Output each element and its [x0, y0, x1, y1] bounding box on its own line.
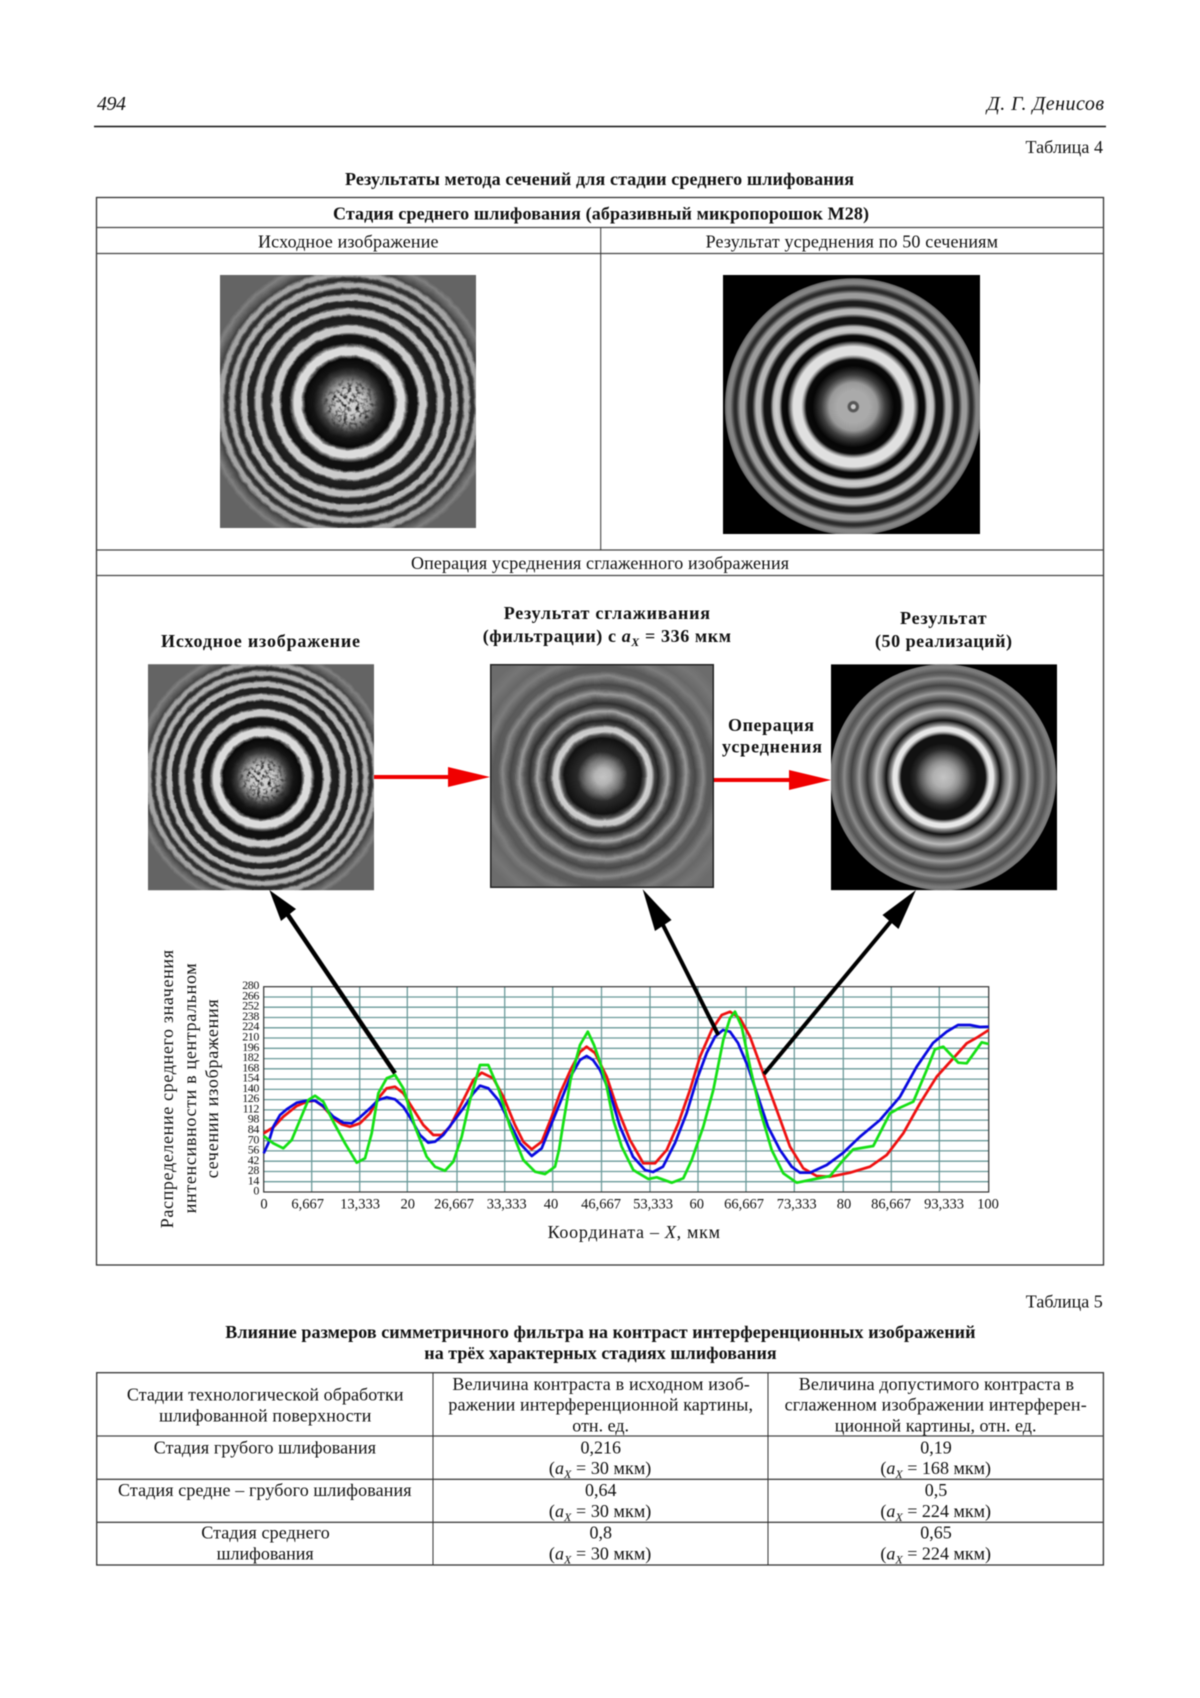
row: medium grinding: X — [563, 1552, 572, 1566]
curve: blue, averaged result — [264, 1025, 989, 1173]
heading: smoothing result: X — [630, 635, 640, 649]
heading: result of 50 realizations: Результат — [900, 608, 987, 628]
table 5 title: на трёх характерных стадиях шлифования — [424, 1343, 777, 1363]
interferogram: source image — [219, 274, 477, 529]
y axis tick labels: 98 — [248, 1112, 259, 1126]
row: coarse grinding: (a — [880, 1458, 895, 1478]
label: averaging operation — [722, 715, 822, 757]
arrow: chart to smoothed image — [643, 889, 718, 1035]
table 4 stage heading: Стадия среднего шлифования (абразивный микропорошок М28) — [333, 204, 869, 224]
table 4 title: Результаты метода сечений для стадии среднего шлифования — [345, 169, 854, 189]
y axis title — [157, 950, 222, 1228]
column heading: processing stages — [127, 1385, 404, 1426]
y axis tick labels: 56 — [248, 1143, 259, 1157]
page number: 494 — [97, 93, 126, 115]
column heading: allowed contrast in smoothed image: сглаженном изображении интерферен- — [785, 1395, 1087, 1415]
row: medium-coarse grinding: Стадия средне – грубого шлифования — [118, 1480, 412, 1500]
x axis tick labels: 40 — [544, 1196, 558, 1212]
row: medium-coarse grinding: X — [563, 1510, 572, 1524]
table 5 title: Влияние размеров симметричного фильтра на контраст интерференционных изображений — [225, 1322, 976, 1342]
x axis tick labels: 20 — [400, 1196, 415, 1212]
table 5 title — [225, 1322, 976, 1363]
row: medium-coarse grinding: (a — [880, 1501, 895, 1521]
row: medium grinding: Стадия среднего — [201, 1522, 330, 1542]
row: medium grinding: (a — [549, 1543, 564, 1563]
interferogram: averaged over 50 sections — [722, 274, 981, 535]
row: medium-coarse grinding: (a — [549, 1501, 564, 1521]
author name: Д. Г. Денисов — [985, 93, 1104, 115]
y axis title: интенсивности в центральном — [180, 963, 200, 1213]
column heading: source image: Исходное изображение — [258, 232, 438, 252]
column heading: contrast in source image: ражении интерференционной картины, — [448, 1395, 753, 1415]
y axis tick labels: 14 — [248, 1173, 259, 1187]
column heading: processing stages: шлифованной поверхности — [159, 1406, 372, 1426]
plot grid — [264, 987, 989, 1192]
x axis tick labels: 86,667 — [871, 1196, 911, 1212]
table 5 label: Таблица 5 — [1026, 1292, 1103, 1312]
row: medium grinding: 0,8 — [590, 1522, 612, 1542]
row: medium grinding: (a — [880, 1543, 895, 1563]
row: coarse grinding: (a — [549, 1458, 564, 1478]
arrow: source to smoothed — [374, 767, 490, 787]
x axis tick labels: 6,667 — [291, 1196, 324, 1212]
column heading: allowed contrast in smoothed image — [785, 1374, 1087, 1436]
y axis tick labels: 238 — [242, 1009, 259, 1023]
row: coarse grinding: = 30 мкм) — [571, 1458, 651, 1479]
y axis tick labels: 182 — [242, 1050, 259, 1064]
arrow: smoothed to averaged — [714, 770, 831, 790]
y axis tick labels: 280 — [242, 978, 259, 992]
x axis tick labels: 13,333 — [340, 1196, 380, 1212]
row: medium-coarse grinding: X — [894, 1510, 903, 1524]
y axis tick labels: 0 — [253, 1184, 259, 1198]
row: medium grinding: шлифования — [217, 1543, 314, 1563]
column heading: contrast in source image — [448, 1374, 753, 1436]
x axis tick labels: 33,333 — [487, 1196, 527, 1212]
column heading: processing stages: Стадии технологической обработки — [127, 1385, 404, 1405]
heading: smoothing result: (фильтрации) с a — [483, 626, 631, 646]
row: medium grinding — [201, 1522, 991, 1566]
row: medium grinding: = 30 мкм) — [571, 1543, 651, 1564]
x axis tick labels: 93,333 — [924, 1196, 964, 1212]
heading: smoothing result: Результат сглаживания — [504, 603, 710, 623]
y axis tick labels: 252 — [242, 999, 259, 1013]
section heading: averaging of smoothed image: Операция усреднения сглаженного изображения — [411, 553, 789, 573]
x axis tick labels: 53,333 — [633, 1196, 673, 1212]
heading: smoothing result — [483, 603, 731, 649]
heading: source image: Исходное изображение — [161, 631, 360, 651]
column heading: contrast in source image: отн. ед. — [572, 1416, 629, 1436]
x axis tick labels: 80 — [837, 1196, 851, 1212]
y axis tick labels: 168 — [242, 1060, 259, 1074]
interferogram: smoothed image — [489, 663, 715, 889]
x axis tick labels: 100 — [977, 1196, 999, 1212]
row: medium-coarse grinding: = 224 мкм) — [903, 1501, 991, 1522]
row: medium grinding: = 224 мкм) — [903, 1543, 991, 1564]
row: coarse grinding: 0,216 — [581, 1437, 621, 1457]
y axis tick labels: 70 — [248, 1132, 259, 1146]
y axis tick labels: 112 — [243, 1102, 259, 1116]
row: medium-coarse grinding: = 30 мкм) — [571, 1501, 651, 1522]
arrow: chart to averaged result — [764, 890, 916, 1074]
x axis tick labels: 26,667 — [434, 1196, 474, 1212]
x axis title: Координата – X, мкм — [548, 1222, 720, 1242]
row: coarse grinding: Стадия грубого шлифования — [154, 1437, 376, 1457]
interferogram: source image, second row — [147, 664, 375, 891]
heading: smoothing result: = 336 мкм — [640, 626, 731, 646]
column heading: allowed contrast in smoothed image: ционной картины, отн. ед. — [835, 1416, 1036, 1436]
label: averaging operation: усреднения — [722, 737, 822, 757]
row: medium-coarse grinding: 0,64 — [585, 1480, 617, 1500]
row: medium-coarse grinding: 0,5 — [925, 1480, 947, 1500]
row: coarse grinding: X — [563, 1467, 572, 1481]
row: medium grinding: 0,65 — [920, 1522, 952, 1542]
heading: result of 50 realizations: (50 реализаций) — [875, 631, 1012, 652]
y axis tick labels: 154 — [242, 1071, 259, 1085]
panel: table 4 — [96, 198, 1104, 1265]
curve: red, source image — [264, 1012, 989, 1177]
row: medium-coarse grinding — [118, 1480, 991, 1524]
heading: result of 50 realizations — [875, 608, 1012, 652]
y axis tick labels: 224 — [242, 1019, 259, 1033]
x axis tick labels: 46,667 — [581, 1196, 621, 1212]
curve: green, smoothed image — [264, 1012, 989, 1183]
row: medium grinding: X — [894, 1552, 903, 1566]
panel: table 5 — [97, 1373, 1103, 1566]
x axis tick labels — [260, 1196, 999, 1212]
y axis tick labels: 28 — [248, 1163, 259, 1177]
row: coarse grinding: 0,19 — [920, 1437, 952, 1457]
row: coarse grinding: = 168 мкм) — [903, 1458, 991, 1479]
column heading: allowed contrast in smoothed image: Величина допустимого контраста в — [799, 1374, 1074, 1394]
column heading: averaged result: Результат усреднения по 50 сечениям — [706, 232, 998, 252]
x axis tick labels: 73,333 — [777, 1196, 817, 1212]
y axis tick labels: 266 — [242, 988, 259, 1002]
y axis tick labels: 126 — [242, 1091, 259, 1105]
interferogram: result of 50 realizations — [830, 664, 1058, 891]
column heading: contrast in source image: Величина контраста в исходном изоб- — [452, 1374, 750, 1394]
page header — [94, 93, 1106, 126]
row: coarse grinding — [154, 1437, 991, 1481]
y axis title: Распределение среднего значения — [157, 950, 177, 1228]
table 4 label: Таблица 4 — [1026, 137, 1103, 157]
y axis title: сечении изображения — [202, 999, 222, 1178]
y axis tick labels: 196 — [242, 1040, 259, 1054]
y axis tick labels: 42 — [248, 1153, 259, 1167]
arrow: chart to source image — [269, 890, 395, 1073]
x axis tick labels: 66,667 — [724, 1196, 764, 1212]
row: coarse grinding: X — [894, 1467, 903, 1481]
line chart: intensity along central section — [157, 950, 999, 1242]
label: averaging operation: Операция — [728, 715, 814, 735]
y axis tick labels — [242, 978, 259, 1198]
y axis tick labels: 210 — [242, 1030, 259, 1044]
x axis tick labels: 0 — [260, 1196, 268, 1212]
x axis tick labels: 60 — [689, 1196, 704, 1212]
y axis tick labels: 84 — [248, 1122, 259, 1136]
y axis tick labels: 140 — [242, 1081, 259, 1095]
